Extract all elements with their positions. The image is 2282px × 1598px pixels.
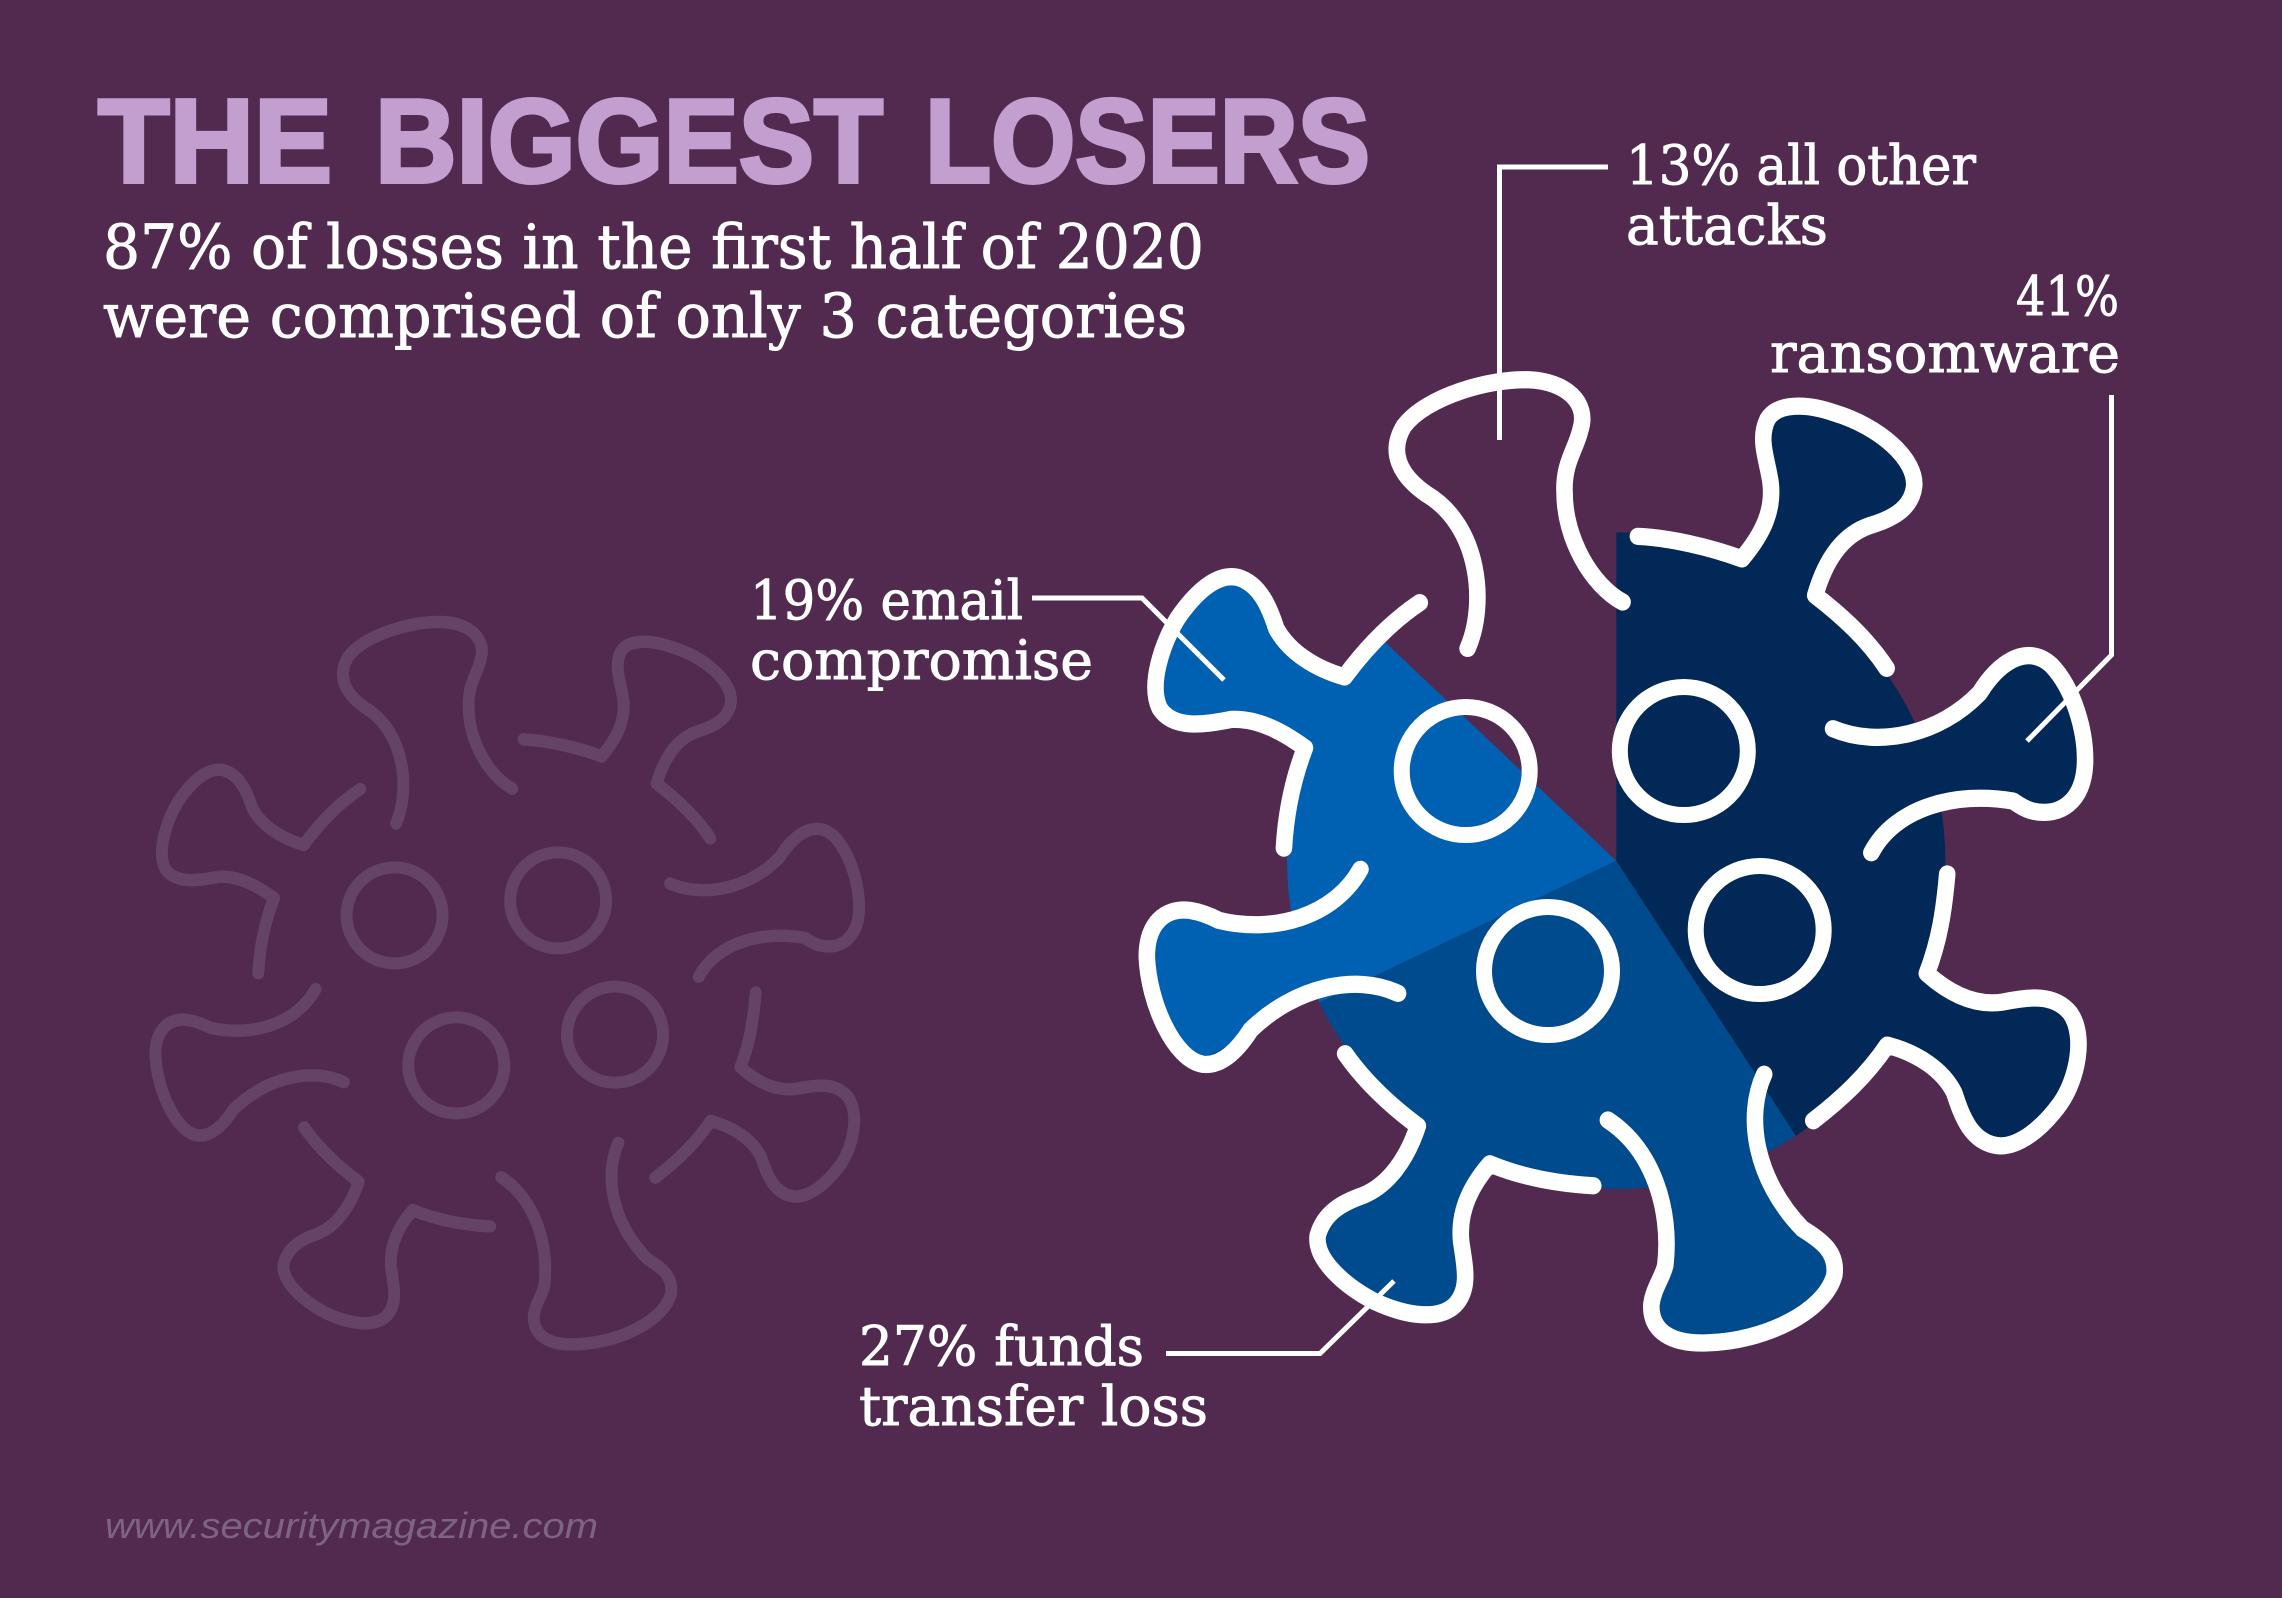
label: 13% all other attacks: attacks: [1626, 194, 1828, 257]
title: THE: [98, 75, 332, 208]
label: 27% funds transfer loss: transfer loss: [859, 1375, 1208, 1438]
subtitle: were comprised of only 3 categories: [103, 281, 1187, 352]
label: 19% email compromise: 19% email: [750, 569, 1023, 632]
label: 41% ransomware: [1770, 265, 2120, 385]
virus circles: [1402, 687, 1824, 1035]
title: BIGGEST: [375, 75, 883, 208]
subtitle: 87% of losses in the first half of 2020: [103, 212, 1204, 283]
label: 41% ransomware: ransomware: [1770, 322, 2120, 385]
label: 41% ransomware: 41%: [2016, 265, 2119, 328]
label: 27% funds transfer loss: 27% funds: [859, 1315, 1144, 1378]
label: 13% all other attacks: [1626, 134, 1976, 257]
leader line: 27%: [1166, 1281, 1394, 1354]
title: [98, 75, 1370, 208]
leader line: 13%: [1500, 167, 1608, 440]
sector: 27% funds transfer loss: [1208, 861, 1826, 1334]
virus white outline: [1147, 380, 2085, 1343]
leader line: 41%: [2027, 395, 2112, 741]
label: 19% email compromise: compromise: [750, 629, 1093, 692]
ghost virus outline: [155, 622, 859, 1344]
subtitle: [103, 212, 1204, 352]
virus pie chart: [1147, 380, 2085, 1343]
title: LOSERS: [925, 75, 1370, 208]
label: 13% all other attacks: 13% all other: [1626, 134, 1976, 197]
sector: 41% ransomware: [1616, 414, 2077, 1138]
label: 27% funds transfer loss: [859, 1315, 1208, 1438]
sector: 19% email compromise: [1155, 585, 1616, 1056]
leader line: 19%: [1032, 598, 1224, 680]
label: 19% email compromise: [750, 569, 1093, 692]
source url: www.securitymagazine.com: [105, 1505, 598, 1546]
